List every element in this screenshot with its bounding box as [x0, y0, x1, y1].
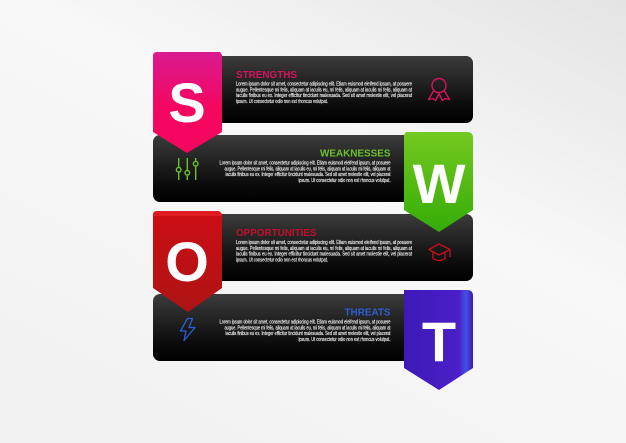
panel: threats — [153, 294, 473, 361]
weaknesses heading: WEAKNESSES — [320, 148, 391, 160]
opportunities body text: augue. Pellentesque mi felis, aliquam at iaculis eu, mi felis, aliquam at iaculis mi felis, aliquam at — [236, 246, 412, 252]
threats body text: Lorem ipsum dolor sit amet, consectetur adipiscing elit. Etiam euismod eleifend ipsum, at posuere — [220, 320, 391, 326]
icon: graduation cap — [429, 244, 450, 260]
strengths body text — [236, 82, 412, 105]
opportunities body text: ipsum. Ut consectetur odio non est rhoncus volutpat. — [236, 257, 328, 263]
weaknesses body text: ipsum. Ut consectetur odio non est rhoncus volutpat. — [298, 178, 390, 184]
threats body text: iaculis finibus eu ex. Integer efficitur tincidunt malesuada. Sed sit amet molestie elit, vel placerat — [226, 331, 391, 337]
icon: sliders — [176, 158, 198, 180]
weaknesses body text: augue. Pellentesque mi felis, aliquam at iaculis eu, mi felis, aliquam at iaculis mi felis, aliquam at — [224, 166, 391, 172]
opportunities bar — [180, 214, 473, 281]
weaknesses body text — [220, 160, 391, 184]
panel: opportunities — [180, 214, 473, 281]
weaknesses bar — [153, 135, 473, 202]
strengths body text: Lorem ipsum dolor sit amet, consectetur adipiscing elit. Etiam euismod eleifend ipsum, at posuere — [236, 82, 412, 88]
weaknesses body text: iaculis finibus eu ex. Integer efficitur tincidunt malesuada. Sed sit amet molestie elit, vel placerat — [226, 172, 391, 178]
threats body text: augue. Pellentesque mi felis, aliquam at iaculis eu, mi felis, aliquam at iaculis mi felis, aliquam at — [224, 325, 391, 331]
strengths heading: STRENGTHS — [236, 70, 297, 81]
letter S: S — [168, 71, 206, 134]
threats body text: ipsum. Ut consectetur odio non est rhoncus volutpat. — [298, 337, 390, 343]
ribbon: W — [404, 132, 473, 232]
opportunities body text: iaculis finibus eu ex. Integer efficitur tincidunt malesuada. Sed sit amet molestie elit, vel placerat — [236, 252, 412, 258]
ribbon: T — [404, 290, 473, 390]
letter W: W — [413, 152, 466, 215]
threats bar — [153, 294, 473, 361]
panel: weaknesses — [153, 135, 473, 202]
strengths body text: ipsum. Ut consectetur odio non est rhoncus volutpat. — [236, 99, 328, 105]
ribbon: O — [153, 211, 222, 312]
strengths bar — [180, 56, 473, 123]
threats heading: THREATS — [344, 308, 391, 318]
strengths body text: iaculis finibus eu ex. Integer efficitur tincidunt malesuada. Sed sit amet molestie elit, vel placerat — [236, 93, 412, 99]
ribbon highlight: O — [153, 211, 222, 216]
opportunities heading: OPPORTUNITIES — [236, 228, 317, 239]
weaknesses body text: Lorem ipsum dolor sit amet, consectetur adipiscing elit. Etiam euismod eleifend ipsum, at posuere — [220, 160, 391, 166]
icon: lightning bolt — [180, 318, 195, 340]
letter T: T — [422, 310, 456, 373]
opportunities body text — [236, 240, 412, 263]
icon: award ribbon — [428, 78, 450, 100]
panel: strengths — [180, 56, 473, 123]
threats body text — [220, 320, 391, 343]
ribbon: S — [153, 52, 222, 153]
strengths body text: augue. Pellentesque mi felis, aliquam at iaculis eu, mi felis, aliquam at iaculis mi felis, aliquam at — [236, 87, 412, 93]
letter O: O — [165, 230, 209, 293]
opportunities body text: Lorem ipsum dolor sit amet, consectetur adipiscing elit. Etiam euismod eleifend ipsum, at posuere — [236, 240, 412, 246]
